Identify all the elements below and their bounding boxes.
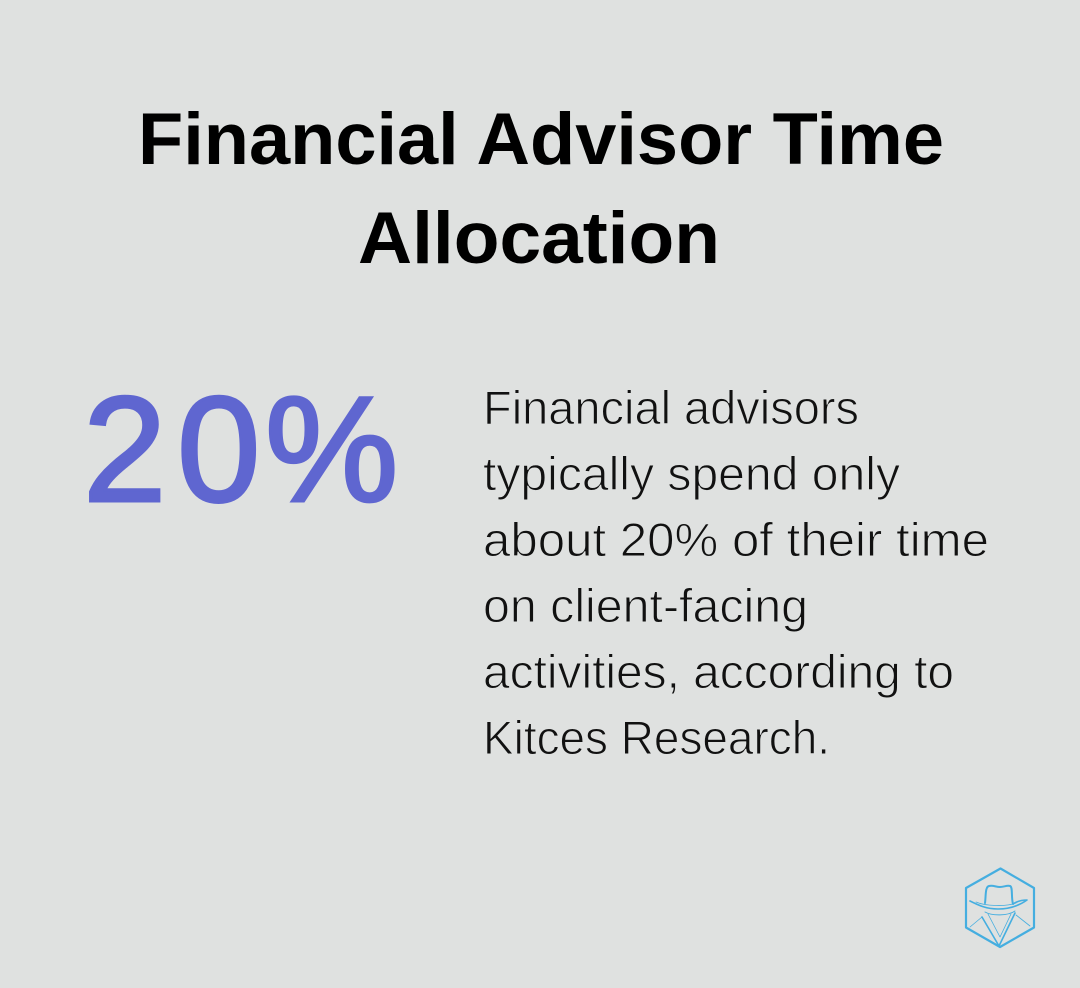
icon: hexagon logo with hat and suit	[966, 868, 1034, 947]
title: Allocation	[358, 198, 720, 279]
title	[138, 99, 944, 279]
description text: on client-facing	[483, 579, 808, 632]
title: Financial Advisor Time	[138, 99, 944, 180]
description text: Kitces Research.	[483, 711, 830, 764]
description text: Financial advisors	[483, 381, 859, 434]
description text	[483, 381, 989, 764]
description text: typically spend only	[483, 447, 901, 500]
description text: about 20% of their time	[483, 513, 989, 566]
description text: activities, according to	[483, 645, 954, 698]
big statistic: 20%: 20%	[83, 365, 398, 533]
